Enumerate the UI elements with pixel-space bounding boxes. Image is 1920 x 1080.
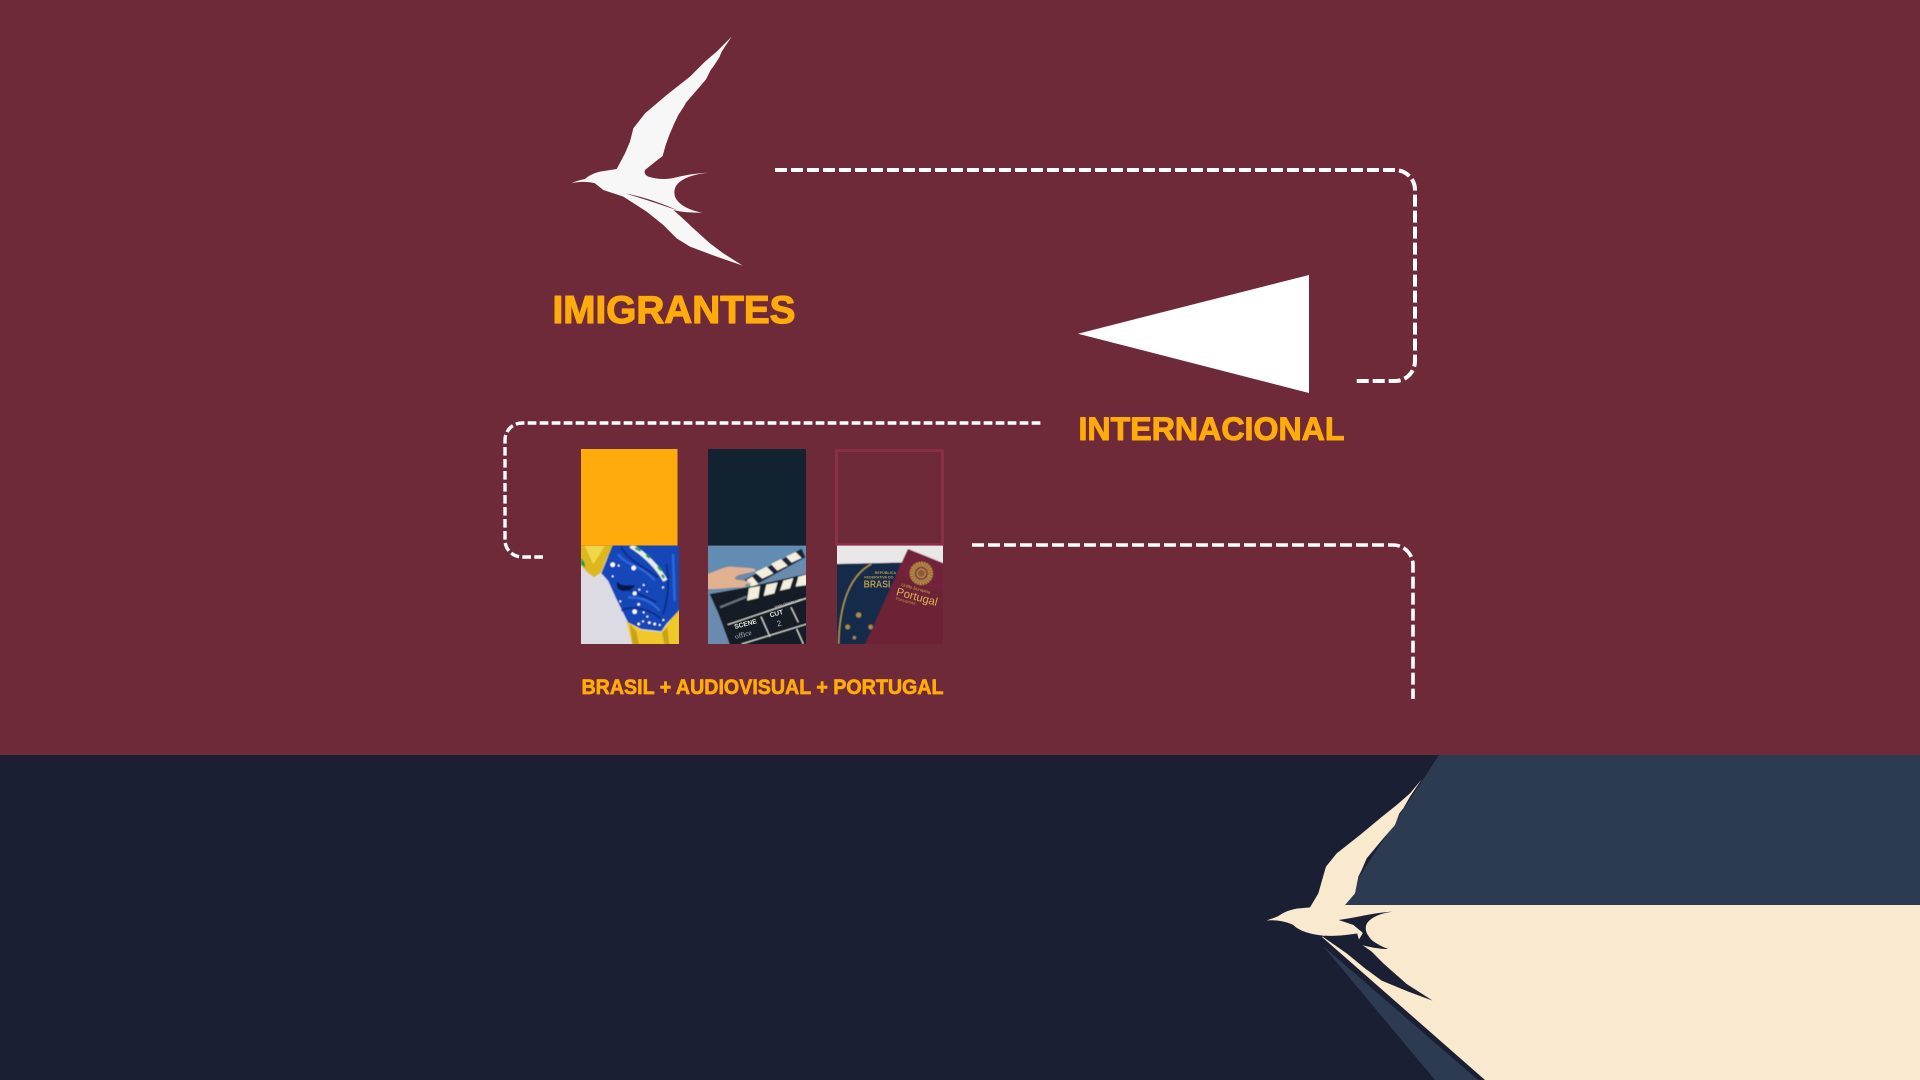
image: Brazilian flag [581, 546, 679, 644]
panel: maroon upper section [0, 0, 1920, 755]
icon: white triangle [1078, 275, 1309, 393]
panel: dark navy square [708, 449, 806, 546]
image: film clapperboard: CUT [769, 609, 784, 619]
image: Brazil and Portugal passports [837, 546, 943, 644]
panel: outlined maroon square [836, 450, 942, 544]
caption: BRASIL + AUDIOVISUAL + PORTUGAL: BRASIL + AUDIOVISUAL + PORTUGAL [582, 676, 944, 699]
image: film clapperboard: 2 [776, 619, 783, 629]
image: film clapperboard: SCENE [734, 618, 758, 631]
icon: cream bird with navy wing and tail [1267, 779, 1433, 1001]
image: Brazil and Portugal passports: Passaporte [895, 596, 917, 606]
image: Brazil and Portugal passports: União Europeia [901, 582, 931, 595]
panel: navy lower section [0, 755, 1920, 1080]
heading: INTERNACIONAL: INTERNACIONAL [1078, 411, 1344, 447]
image: Brazil and Portugal passports: REPÚBLICA [875, 570, 896, 575]
icon: white bird [572, 37, 743, 266]
arrow: dashed connector from triangle to images [505, 423, 1043, 557]
image: film clapperboard: www.clapper.com [774, 597, 803, 609]
image: Brazil and Portugal passports: Portugal [895, 586, 939, 609]
image: Brazil and Portugal passports: BRASI [864, 580, 891, 591]
heading: IMIGRANTES: IMIGRANTES [552, 289, 796, 332]
panel: yellow square [581, 449, 678, 546]
arrow: dashed connector from images going down [972, 545, 1413, 699]
image: Brazil and Portugal passports: FEDERATIVA DO [864, 576, 894, 580]
arrow: dashed connector from bird to triangle [775, 170, 1415, 381]
image: film clapperboard: office [734, 628, 753, 641]
image: film clapperboard [708, 546, 806, 644]
